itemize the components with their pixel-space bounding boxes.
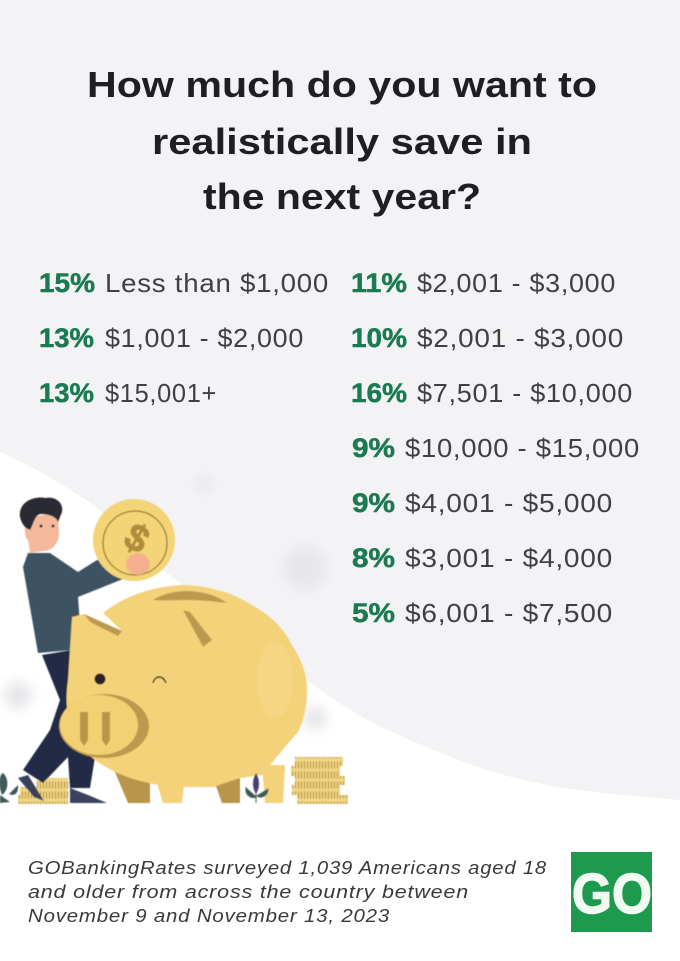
footnote: GOBankingRates surveyed 1,039 Americans aged 18 xyxy=(28,858,547,878)
title: realistically save in xyxy=(152,121,532,162)
right column of survey results: $7,501 - $10,000 xyxy=(417,378,633,408)
footnote xyxy=(28,858,547,926)
piggy dark legs xyxy=(112,765,240,803)
hand xyxy=(126,553,150,575)
left column of survey results: 15% xyxy=(39,268,95,298)
right column of survey results: 9% xyxy=(352,433,395,463)
title: the next year? xyxy=(203,176,481,217)
left column of survey results: 13% xyxy=(39,323,94,353)
right column of survey results: $6,001 - $7,500 xyxy=(405,598,613,628)
illustration: man and piggy bank xyxy=(0,498,348,804)
right column of survey results: $2,001 - $3,000 xyxy=(417,268,616,298)
right column of survey results: 11% xyxy=(351,268,407,298)
right column of survey results: $4,001 - $5,000 xyxy=(405,488,613,518)
gold coin: $ xyxy=(117,515,156,562)
footnote: and older from across the country between xyxy=(28,882,469,902)
man's legs xyxy=(23,650,95,788)
logo: GO: GO xyxy=(572,862,652,926)
footnote: November 9 and November 13, 2023 xyxy=(28,906,390,926)
title xyxy=(87,64,597,217)
left column of survey results: $1,001 - $2,000 xyxy=(105,323,304,353)
piggy eyes xyxy=(94,674,106,684)
piggy light legs xyxy=(150,765,285,803)
man's torso and arm xyxy=(23,553,128,653)
piggy ear and slot xyxy=(84,591,227,647)
right column of survey results: $3,001 - $4,000 xyxy=(405,543,613,573)
right column of survey results: 5% xyxy=(352,598,395,628)
plant: centre xyxy=(253,773,259,794)
right column of survey results: $2,001 - $3,000 xyxy=(417,323,624,353)
left column of survey results: $15,001+ xyxy=(105,378,217,408)
piggy snout xyxy=(59,694,149,758)
left column of survey results xyxy=(39,268,329,408)
left column of survey results: 13% xyxy=(39,378,94,408)
plant: left xyxy=(0,773,18,803)
right column of survey results: 8% xyxy=(352,543,395,573)
gold coin xyxy=(93,499,175,581)
right column of survey results: 9% xyxy=(352,488,395,518)
right column of survey results: 10% xyxy=(351,323,407,353)
coin stack: right xyxy=(291,757,348,804)
piggy belly highlight xyxy=(257,642,293,718)
man's shoes xyxy=(18,775,107,803)
right column of survey results: $10,000 - $15,000 xyxy=(405,433,640,463)
man's head xyxy=(20,498,62,553)
blurred background blobs xyxy=(4,476,327,730)
title: How much do you want to xyxy=(87,64,597,105)
right column of survey results: 16% xyxy=(351,378,407,408)
coin stack: left xyxy=(18,778,68,804)
right column of survey results xyxy=(351,268,640,628)
left column of survey results: Less than $1,000 xyxy=(105,268,329,298)
piggy body xyxy=(67,585,307,787)
